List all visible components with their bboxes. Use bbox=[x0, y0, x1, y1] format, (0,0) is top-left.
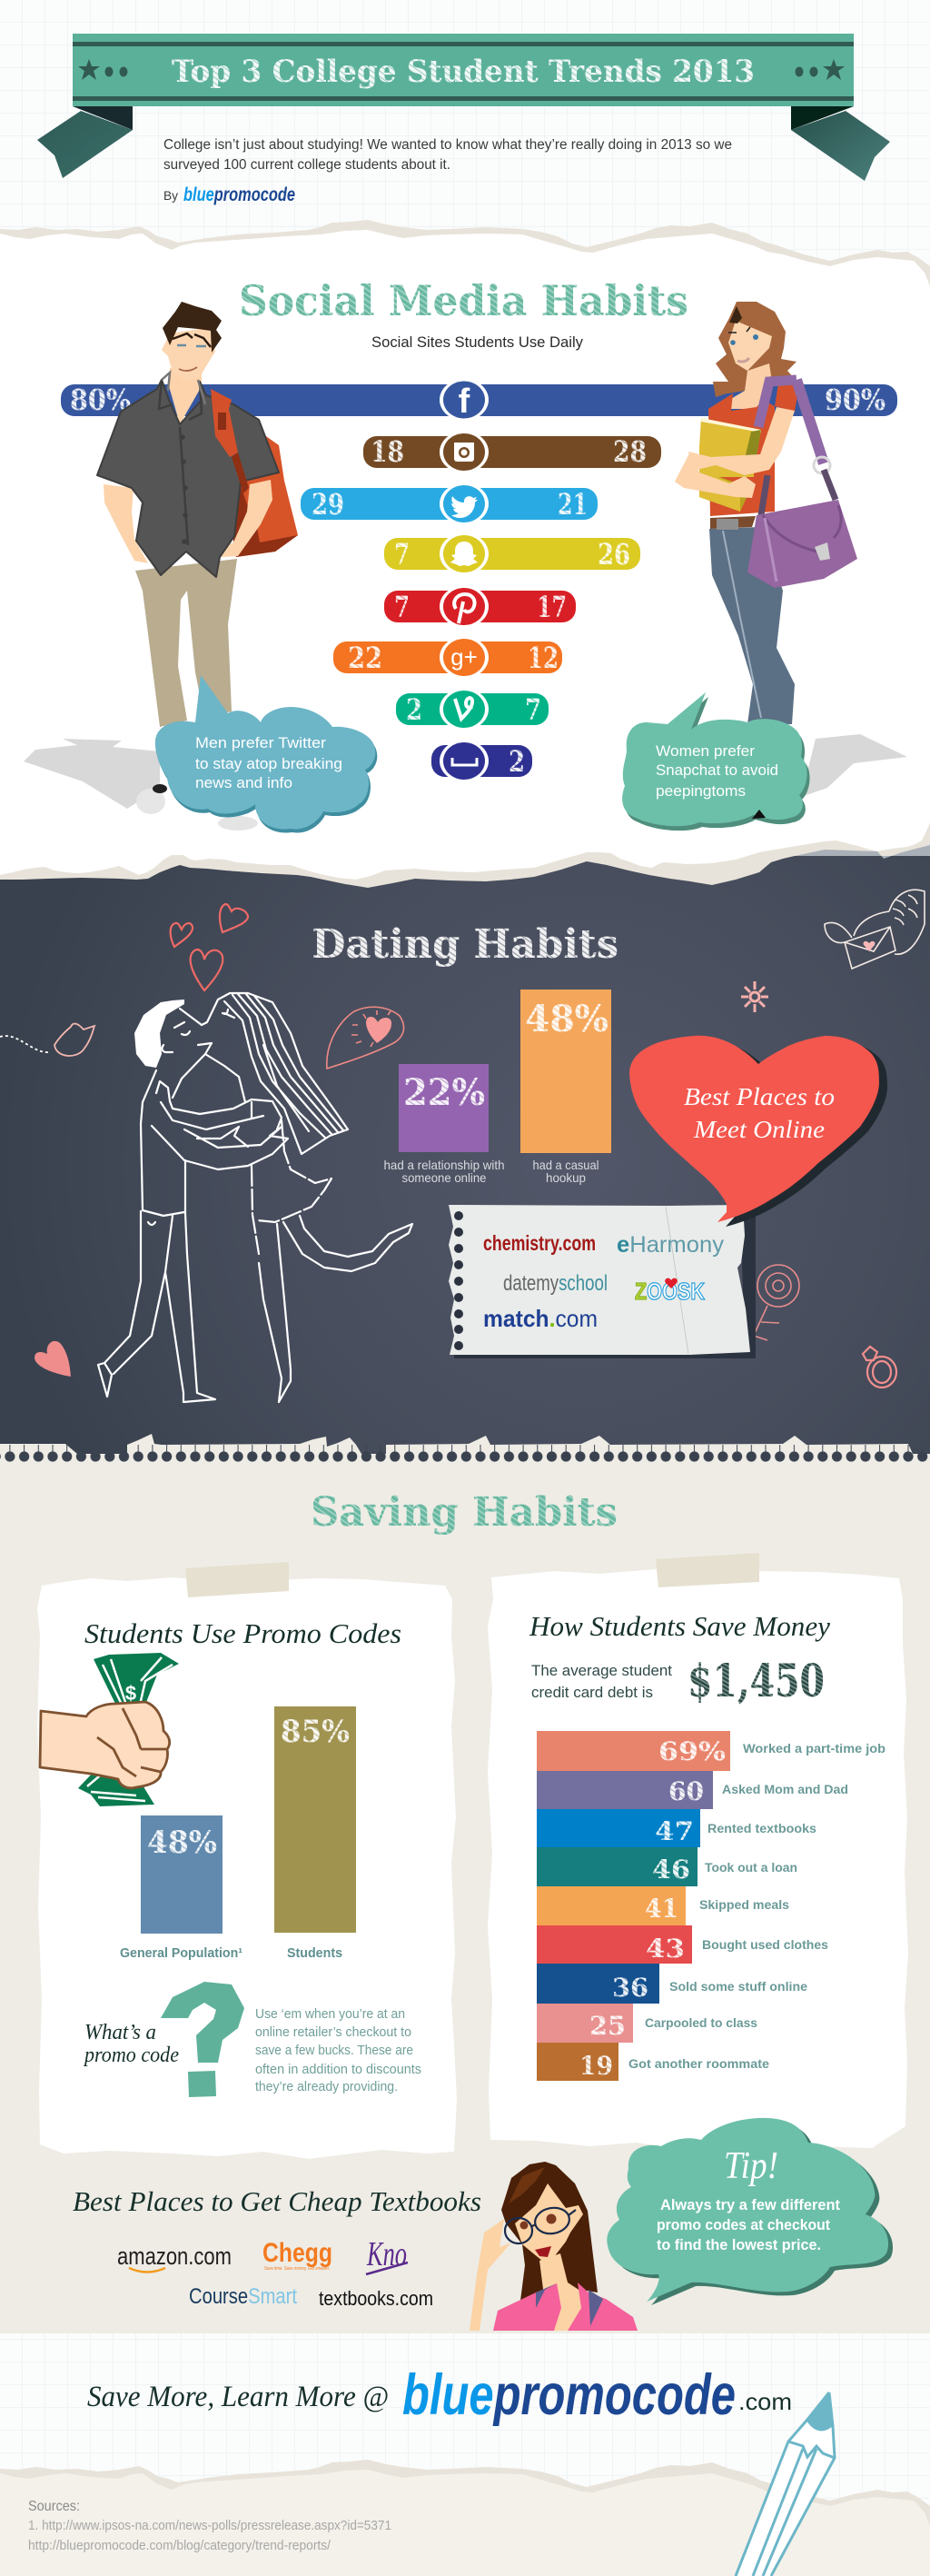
credit card debt text: credit card debt is bbox=[531, 1684, 653, 1701]
promo code description: online retailer’s checkout to bbox=[255, 2025, 411, 2040]
arms holding books bbox=[675, 407, 795, 498]
bar: carpooled to class: 25 bbox=[589, 2011, 626, 2041]
bar: vine: 2 bbox=[406, 692, 422, 727]
icon: left star and dots bbox=[78, 59, 127, 80]
illustration: kissing couple chalk drawing bbox=[98, 993, 412, 1402]
bar: rented textbooks bbox=[537, 1809, 816, 1847]
man's hair bbox=[134, 1000, 184, 1068]
icon: right star and dots bbox=[796, 59, 845, 80]
bar: instagram: 28 bbox=[613, 434, 647, 469]
bar chart: promo code use bbox=[120, 1706, 356, 1961]
bar: other network bbox=[431, 740, 532, 781]
promo code description: save a few bucks. These are bbox=[255, 2044, 413, 2058]
bar: sold some stuff online: 36 bbox=[612, 1973, 648, 2003]
tape bbox=[185, 1562, 289, 1597]
bar: sold some stuff online bbox=[537, 1964, 808, 2004]
bar: carpooled to class: Carpooled to class bbox=[645, 2016, 757, 2030]
bar: rented textbooks: Rented textbooks bbox=[707, 1822, 816, 1835]
bar: bought used clothes: Bought used clothes bbox=[702, 1938, 828, 1952]
logo: kno bbox=[366, 2235, 408, 2274]
icon: question mark bbox=[161, 1982, 244, 2097]
illustration: woman with glasses bbox=[470, 2162, 638, 2331]
panel: saving habits bbox=[0, 1434, 930, 2333]
callout: women prefer snapchat bbox=[622, 692, 810, 830]
bar: general population: General Population¹ bbox=[120, 1946, 242, 1961]
bar: facebook: 80% bbox=[70, 383, 131, 417]
logo: byline: bluepromocode bbox=[183, 184, 295, 205]
heading: best places to get cheap textbooks: Best Places to Get Cheap Textbooks bbox=[73, 2185, 481, 2217]
ring holes bbox=[454, 1211, 463, 1350]
callout: women prefer snapchat: Snapchat to avoid bbox=[656, 761, 778, 779]
books bbox=[699, 418, 761, 512]
intro text bbox=[163, 137, 732, 205]
callout: tip: promo codes at checkout bbox=[657, 2217, 830, 2233]
intro text: College isn’t just about studying! We wanted to know what they’re really doing in 2013 so we bbox=[163, 137, 732, 153]
bar: vine bbox=[396, 689, 549, 731]
bar: google plus bbox=[333, 636, 562, 678]
what's a promo code label: promo code bbox=[83, 2044, 179, 2067]
decoration: diamond ring bbox=[863, 1347, 896, 1387]
bar: took out a loan: Took out a loan bbox=[705, 1861, 797, 1875]
bar chart: online dating bbox=[383, 990, 611, 1185]
logo: zoosk: ZOOSK bbox=[635, 1278, 705, 1305]
callout: women prefer snapchat: Women prefer bbox=[656, 742, 755, 760]
bar: carpooled to class bbox=[537, 2004, 757, 2043]
decoration: pink hearts bbox=[171, 904, 248, 990]
decoration: chalk bird left bbox=[0, 1024, 94, 1056]
bar: snapchat: 26 bbox=[598, 537, 630, 572]
bar: had a casual hookup: 48% bbox=[525, 998, 608, 1040]
bar: had a relationship online: someone online bbox=[401, 1170, 487, 1185]
bar: skipped meals: 41 bbox=[645, 1894, 678, 1924]
bar: sold some stuff online: Sold some stuff online bbox=[669, 1980, 808, 1994]
promo code description: often in addition to discounts bbox=[255, 2063, 421, 2077]
promo code description bbox=[255, 2007, 421, 2094]
shoulder strap bbox=[758, 380, 796, 427]
bar: skipped meals: Skipped meals bbox=[699, 1898, 789, 1912]
callout: men prefer twitter: news and info bbox=[195, 774, 292, 791]
jeans bbox=[709, 527, 795, 724]
man's face and torso bbox=[141, 1009, 202, 1216]
bar: had a casual hookup: had a casual bbox=[532, 1158, 599, 1172]
bar: took out a loan: 46 bbox=[652, 1855, 690, 1885]
intro text: By bbox=[163, 188, 178, 203]
bar: bought used clothes: 43 bbox=[646, 1934, 685, 1964]
callout: tip: Tip! bbox=[724, 2145, 778, 2187]
hair bbox=[501, 2162, 598, 2301]
bar: had a relationship online bbox=[383, 1064, 505, 1185]
logo: blue promo code: bluepromocode bbox=[402, 2363, 736, 2427]
sources text: http://bluepromocode.com/blog/category/trend-reports/ bbox=[28, 2539, 331, 2553]
title: How Students Save Money bbox=[529, 1610, 830, 1642]
panel: students use promo codes bbox=[37, 1562, 457, 2159]
bar: twitter: 21 bbox=[558, 487, 588, 522]
bar: took out a loan bbox=[537, 1847, 797, 1886]
title banner bbox=[37, 34, 890, 181]
man's legs bbox=[98, 1211, 215, 1402]
callout: men prefer twitter: to stay atop breaking bbox=[195, 755, 342, 772]
logo: amazon: amazon.com bbox=[117, 2243, 232, 2270]
neck and chest bbox=[169, 368, 202, 424]
title: Top 3 College Student Trends 2013 bbox=[172, 54, 755, 90]
textbook logos bbox=[117, 2235, 433, 2310]
decoration: flower bbox=[741, 981, 768, 1012]
bar: other network: 2 bbox=[509, 744, 525, 779]
decoration: rose bbox=[749, 1265, 799, 1345]
logo: chegg: Chegg bbox=[262, 2238, 332, 2268]
bar: worked a part-time job: Worked a part-time job bbox=[743, 1742, 885, 1755]
bar: general population bbox=[120, 1815, 242, 1961]
heading: Social Media Habits bbox=[239, 276, 688, 325]
right ribbon tail bbox=[791, 106, 890, 181]
bar: skipped meals bbox=[537, 1886, 789, 1925]
shoes bbox=[136, 784, 258, 830]
glasses bbox=[505, 2205, 576, 2243]
bar: twitter: 29 bbox=[312, 487, 344, 522]
bar: pinterest bbox=[384, 585, 576, 627]
logo: match.com: match.com bbox=[483, 1305, 598, 1332]
bar: instagram bbox=[363, 431, 661, 472]
bar: google plus: g+ bbox=[450, 643, 478, 671]
sleeve bbox=[775, 383, 799, 412]
callout: men prefer twitter: Men prefer Twitter bbox=[195, 734, 326, 751]
sources text bbox=[28, 2499, 391, 2553]
bar: had a casual hookup bbox=[520, 990, 611, 1185]
bar: bought used clothes bbox=[537, 1925, 828, 1964]
logo: eHarmony: eHarmony bbox=[617, 1232, 725, 1258]
callout: women prefer snapchat: peepingtoms bbox=[656, 782, 746, 800]
bar: worked a part-time job: 69% bbox=[658, 1736, 726, 1766]
bar: facebook bbox=[61, 379, 897, 421]
logo: chegg: Save time. Save money. Get smarter. bbox=[264, 2266, 330, 2272]
bar: google plus: 12 bbox=[528, 641, 559, 675]
bar: had a casual hookup: hookup bbox=[546, 1170, 586, 1185]
bar: google plus: 22 bbox=[348, 641, 382, 675]
logo: coursesmart: CourseSmart bbox=[189, 2284, 297, 2309]
shirt bbox=[97, 380, 279, 577]
subheading: Social Sites Students Use Daily bbox=[371, 333, 583, 351]
callout: best places to meet online heart: Meet Online bbox=[693, 1116, 825, 1143]
bar: asked mom and dad: 60 bbox=[668, 1776, 704, 1806]
bar: rented textbooks: 47 bbox=[655, 1816, 694, 1846]
bar: twitter bbox=[301, 483, 598, 525]
note: dating site logos bbox=[449, 1205, 756, 1358]
decoration: letter bird top right bbox=[825, 890, 925, 969]
bar: pinterest: 7 bbox=[394, 590, 410, 624]
chart: social sites bars bbox=[61, 379, 897, 781]
what's a promo code label: What’s a bbox=[84, 2021, 156, 2044]
hair bbox=[713, 302, 796, 397]
sources text: 1. http://www.ipsos-na.com/news-polls/pressrelease.aspx?id=5371 bbox=[28, 2519, 391, 2533]
callout: men prefer twitter bbox=[155, 675, 377, 833]
decoration: filled heart bbox=[35, 1341, 71, 1377]
left ribbon tail bbox=[37, 106, 133, 178]
panel: how students save money bbox=[488, 1553, 908, 2150]
bar: facebook: f bbox=[459, 383, 470, 421]
backpack bbox=[230, 434, 298, 557]
handbag bbox=[747, 500, 857, 588]
top bbox=[708, 393, 775, 516]
panel: dating habits bbox=[0, 822, 930, 1459]
bar: students: 85% bbox=[281, 1714, 350, 1750]
belt bbox=[710, 516, 756, 530]
bar: instagram: 18 bbox=[371, 434, 404, 469]
bar: students bbox=[274, 1706, 356, 1961]
bar: asked mom and dad bbox=[537, 1771, 848, 1809]
blazer bbox=[493, 2283, 638, 2331]
bar: snapchat: 7 bbox=[394, 537, 410, 572]
trousers bbox=[135, 559, 237, 727]
callout: best places to meet online heart bbox=[629, 1036, 887, 1227]
raised arm bbox=[470, 2219, 511, 2331]
icon: fist holding money: $ bbox=[125, 1682, 136, 1705]
logo: textbooks.com: textbooks.com bbox=[319, 2287, 433, 2310]
panel: sources footer bbox=[0, 2460, 930, 2576]
woman's face and hair bbox=[202, 993, 348, 1154]
bar: got another roommate: 19 bbox=[579, 2051, 613, 2081]
domain suffix: .com bbox=[738, 2388, 792, 2415]
decoration: heart speech bubble bbox=[327, 1007, 404, 1069]
icon: fist holding money bbox=[40, 1653, 179, 1806]
bar: pinterest: 17 bbox=[537, 590, 567, 624]
credit card debt text bbox=[531, 1662, 672, 1701]
intro text: surveyed 100 current college students about it. bbox=[163, 157, 450, 173]
heading: Dating Habits bbox=[312, 921, 618, 968]
bar: had a relationship online: 22% bbox=[403, 1071, 485, 1114]
bar: had a relationship online: had a relationship with bbox=[383, 1158, 505, 1172]
callout: tip: Always try a few different bbox=[660, 2197, 840, 2213]
arms bbox=[104, 480, 272, 563]
head bbox=[162, 327, 215, 381]
logo: kno: Kno bbox=[366, 2235, 407, 2273]
promo code description: Use ‘em when you’re at an bbox=[255, 2007, 405, 2022]
chest bbox=[729, 363, 772, 409]
callout: tip: to find the lowest price. bbox=[657, 2237, 821, 2253]
sources text: Sources: bbox=[28, 2499, 80, 2514]
panel: footer call to action bbox=[87, 2363, 792, 2427]
bar: general population: 48% bbox=[147, 1825, 217, 1861]
illustration: male student bbox=[24, 302, 298, 830]
credit card debt text: The average student bbox=[531, 1662, 672, 1679]
bar: vine: 7 bbox=[525, 692, 541, 727]
bar: asked mom and dad: Asked Mom and Dad bbox=[722, 1783, 848, 1796]
bar: worked a part-time job bbox=[537, 1731, 885, 1771]
face bbox=[728, 321, 772, 371]
promo code description: they’re already providing. bbox=[255, 2080, 398, 2094]
bar: got another roommate: Got another roommate bbox=[628, 2057, 770, 2071]
illustration: female student bbox=[675, 302, 907, 797]
big number: credit card debt: $1,450 bbox=[688, 1654, 825, 1707]
face bbox=[515, 2183, 583, 2265]
bar chart: how students save bbox=[537, 1731, 885, 2081]
embracing arms bbox=[156, 1081, 282, 1147]
woman's body and legs bbox=[252, 1120, 331, 1254]
bar: snapchat bbox=[384, 532, 640, 574]
what's a promo code label bbox=[83, 2021, 179, 2067]
title: Students Use Promo Codes bbox=[84, 1617, 401, 1649]
bar: facebook: 90% bbox=[825, 383, 885, 417]
heading: Saving Habits bbox=[311, 1489, 618, 1536]
panel: social media habits bbox=[0, 220, 930, 890]
icon: pencil bbox=[736, 2392, 835, 2576]
bar: students: Students bbox=[287, 1946, 342, 1961]
tape bbox=[656, 1553, 759, 1587]
logo: chemistry.com: chemistry.com bbox=[483, 1231, 596, 1255]
logo: datemyschool: datemyschool bbox=[503, 1271, 608, 1296]
call to action text: Save More, Learn More @ bbox=[87, 2381, 389, 2413]
neck bbox=[539, 2253, 589, 2331]
bag strap bbox=[211, 389, 249, 493]
callout: tip bbox=[607, 2118, 893, 2305]
bar: got another roommate bbox=[537, 2043, 770, 2081]
callout: best places to meet online heart: Best Places to bbox=[684, 1083, 835, 1110]
